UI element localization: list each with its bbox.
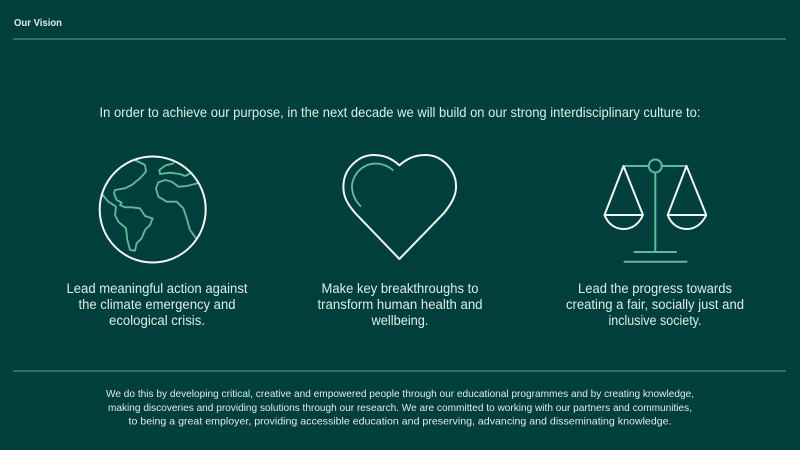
text: climate column <box>66 281 248 328</box>
text: climate column: ecological crisis. <box>109 313 205 328</box>
text: society column: inclusive society. <box>608 313 702 328</box>
intro sentence: In order to achieve our purpose, in the next decade we will build on our strong interdisciplinary culture to: <box>100 104 700 120</box>
footer paragraph: to being a great employer, providing accessible education and preserving, advancing and disseminating knowledge. <box>128 416 672 428</box>
footer paragraph: making discoveries and providing solutions through our research. We are committed to working with our partners and communities, <box>108 402 692 414</box>
text: health column: transform human health and <box>318 297 482 312</box>
text: society column: creating a fair, socially just and <box>566 297 744 312</box>
text: climate column: Lead meaningful action against <box>66 281 248 296</box>
text: health column: wellbeing. <box>371 313 428 328</box>
icon: heart <box>343 155 456 259</box>
title: Our Vision <box>14 17 62 29</box>
text: health column: Make key breakthroughs to <box>322 281 478 296</box>
icon: scales of justice <box>604 160 706 262</box>
footer paragraph: We do this by developing critical, creative and empowered people through our educational programmes and by creating knowledge, <box>106 388 694 400</box>
text: society column: Lead the progress towards <box>578 281 732 296</box>
text: climate column: the climate emergency and <box>78 297 236 312</box>
footer paragraph <box>106 388 694 428</box>
icon: globe <box>100 156 206 262</box>
text: society column <box>566 281 744 328</box>
text: health column <box>318 281 482 328</box>
